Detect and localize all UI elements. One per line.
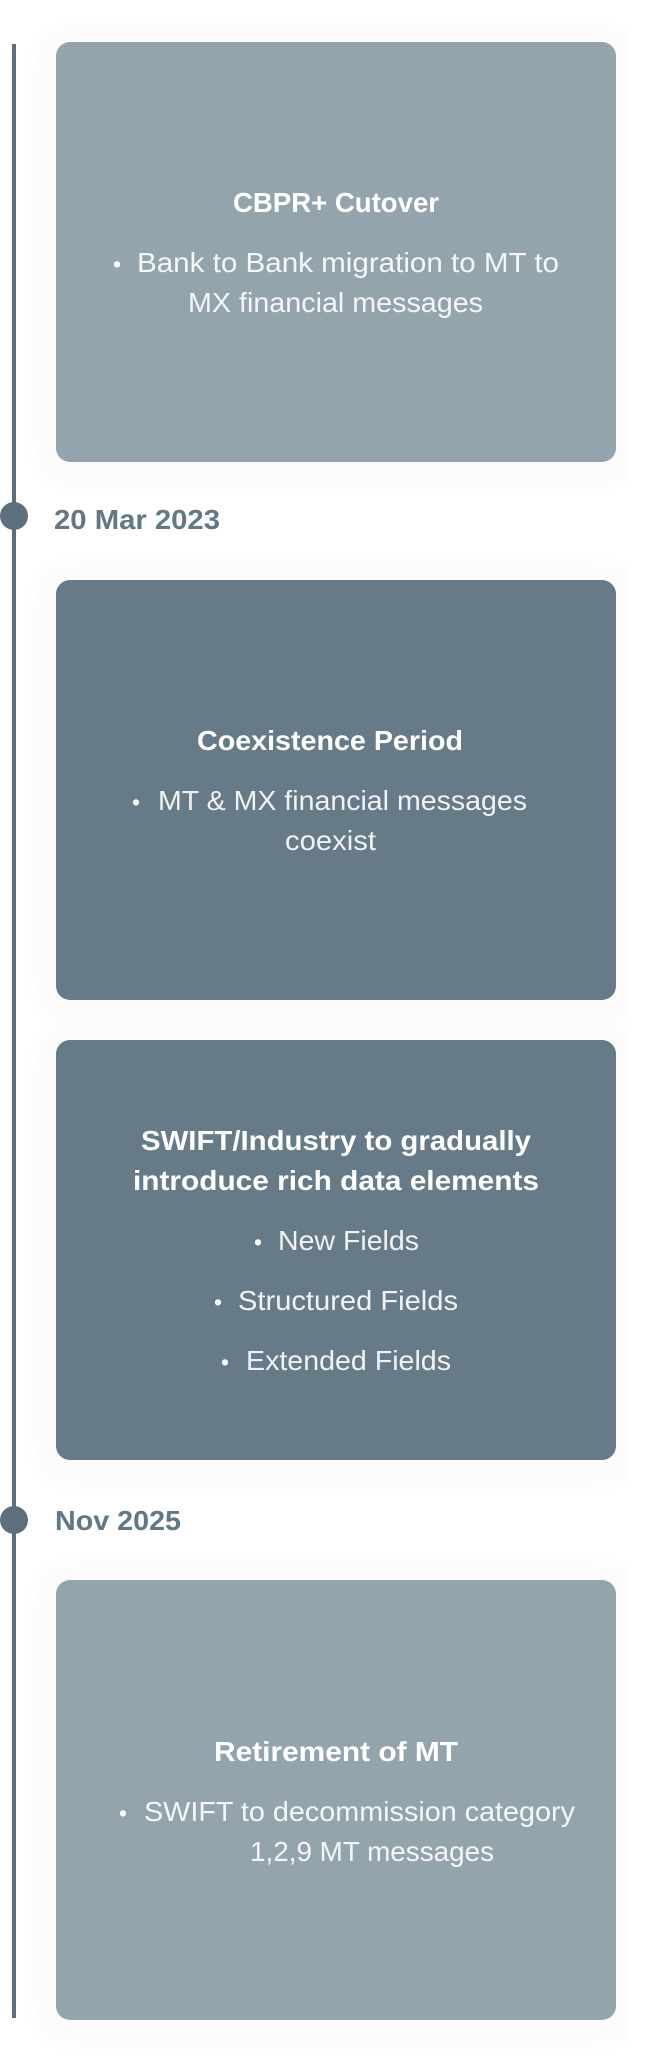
- heading: SWIFT/Industry to gradually introduce rich data elements: SWIFT/Industry to gradually: [141, 1125, 531, 1156]
- text block: Extended Fields: Extended Fields: [246, 1345, 451, 1376]
- text block: New Fields: •: [254, 1229, 262, 1255]
- date label: 20 Mar 2023: 20 Mar 2023: [54, 504, 220, 535]
- text block: decommission bullet: SWIFT to decommission category: [144, 1796, 575, 1827]
- panel: rich data elements: [56, 1040, 616, 1460]
- panel: CBPR+ Cutover: [56, 42, 616, 462]
- date label: Nov 2025: Nov 2025: [55, 1505, 181, 1536]
- text block: decommission bullet: 1,2,9 MT messages: [250, 1836, 494, 1867]
- heading: CBPR+ Cutover: CBPR+ Cutover: [233, 187, 439, 218]
- text block: decommission bullet: [119, 1796, 575, 1867]
- heading: Coexistence Period: Coexistence Period: [197, 725, 463, 756]
- heading: Retirement of MT: Retirement of MT: [214, 1736, 458, 1767]
- text block: coexistence bullet: •: [132, 789, 140, 815]
- text block: Structured Fields: •: [214, 1289, 222, 1315]
- timeline line: [12, 44, 16, 2018]
- marker: Nov 2025: [0, 1506, 28, 1534]
- text block: migration bullet: Bank to Bank migration to MT to: [137, 247, 559, 278]
- text block: coexistence bullet: MT & MX financial messages: [158, 785, 527, 816]
- panel: Coexistence Period: [56, 580, 616, 1000]
- marker: 20 Mar 2023: [0, 502, 28, 530]
- heading: SWIFT/Industry to gradually introduce rich data elements: [133, 1125, 539, 1196]
- text block: Extended Fields: •: [221, 1349, 229, 1375]
- text block: Structured Fields: Structured Fields: [238, 1285, 458, 1316]
- text block: coexistence bullet: [132, 785, 527, 856]
- text block: migration bullet: [113, 247, 559, 318]
- text block: migration bullet: •: [113, 251, 121, 277]
- panel: Retirement of MT: [56, 1580, 616, 2020]
- heading: SWIFT/Industry to gradually introduce rich data elements: introduce rich data elements: [133, 1165, 539, 1196]
- text block: New Fields: New Fields: [278, 1225, 419, 1256]
- text block: migration bullet: MX financial messages: [188, 287, 483, 318]
- text block: coexistence bullet: coexist: [285, 825, 376, 856]
- text block: decommission bullet: •: [119, 1800, 127, 1826]
